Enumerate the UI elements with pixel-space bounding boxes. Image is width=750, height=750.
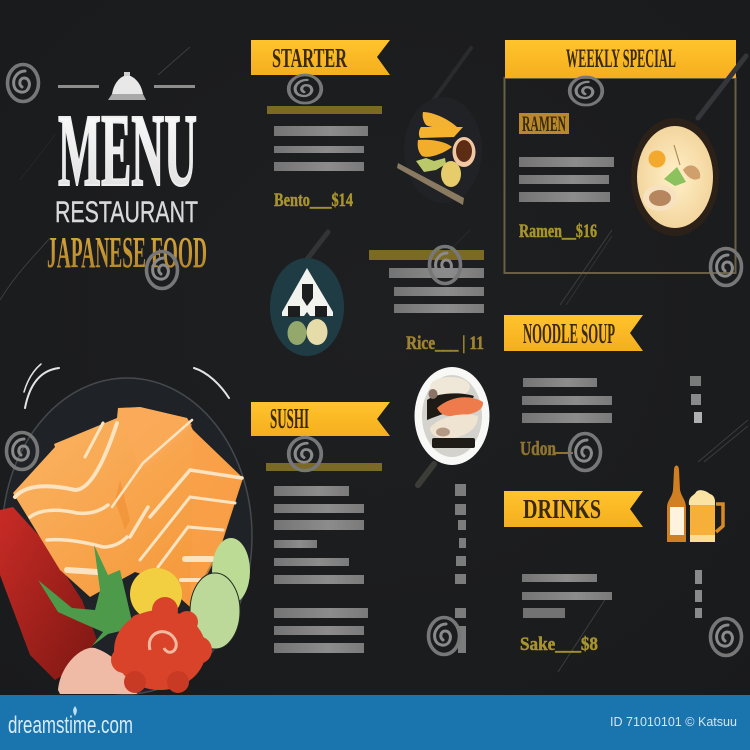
section text: onigiri: [369, 250, 484, 354]
tuna slice: [0, 507, 97, 680]
text: JAPANESE FOOD: [47, 228, 207, 277]
white plate accent strokes: [24, 364, 229, 408]
panel: weekly special: RAMEN: [522, 111, 566, 136]
banner: starters: [251, 40, 390, 75]
cucumber slices: [190, 538, 250, 649]
decorative swirl icons: [6, 64, 742, 656]
banner: drinks: DRINKS: [523, 494, 601, 524]
lemon slice: [130, 568, 182, 614]
section text: noodle soup: [520, 376, 702, 460]
panel: weekly special: Ramen__$16: [519, 221, 597, 242]
illustration: ramen bowl: [631, 56, 746, 236]
illustration: onigiri plate: [270, 232, 344, 356]
banner: drinks: [504, 491, 643, 527]
section text: drinks: [520, 570, 702, 655]
section text: noodle soup: Udon: [520, 438, 556, 460]
icon: beer bottle and mug: [667, 466, 723, 542]
salmon roe cluster: [111, 597, 212, 693]
subtitle: RESTAURANT: RESTAURANT: [55, 196, 198, 229]
footer image id: ID 71010101 © Katsuu: [610, 714, 737, 729]
banner: sushi: SUSHI: [270, 403, 309, 435]
illustration: sashimi plate: [0, 378, 252, 694]
price column: sushi: [455, 484, 466, 653]
section text: starters: Bento___$14: [274, 190, 353, 211]
illustration: sushi plate: [414, 367, 490, 485]
banner: noodle soup: [504, 315, 643, 351]
pale fish slice: [58, 648, 137, 694]
illustration: bowl with tempura: [397, 48, 482, 205]
section text: onigiri: Rice___ | 11: [406, 333, 484, 354]
shiso leaf: [38, 545, 133, 646]
text: MENU: [58, 93, 197, 208]
footer logo: dreamstime.com: [8, 712, 133, 739]
banner: sushi: [251, 402, 390, 436]
section text: sushi: [266, 463, 382, 653]
logo: cloche and rules: [58, 72, 195, 100]
footer bar: [0, 695, 750, 750]
banner: starters: STARTER: [272, 43, 347, 73]
panel: weekly special: [504, 40, 736, 273]
banner: noodle soup: NOODLE SOUP: [523, 318, 615, 350]
section text: starters: [267, 106, 382, 211]
section text: drinks: Sake___$8: [520, 634, 598, 655]
